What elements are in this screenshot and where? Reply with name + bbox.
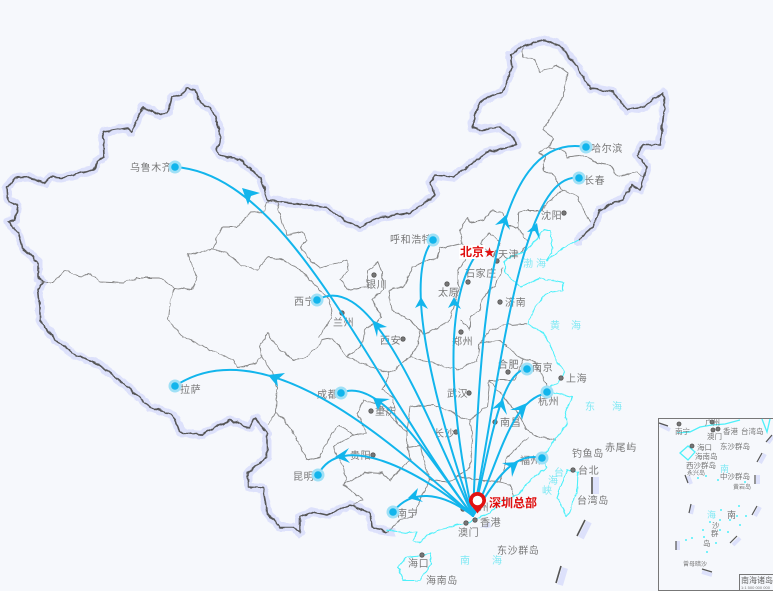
coastline and islands	[387, 230, 578, 580]
Hainan island outline	[398, 553, 432, 580]
provincial boundaries	[40, 47, 643, 532]
city markers and labels: 广州	[468, 502, 489, 514]
city markers and labels: 东沙群岛	[497, 544, 539, 557]
city markers and labels: 香港	[480, 517, 501, 529]
inset labels: 海	[707, 509, 716, 520]
city markers and labels: 哈尔滨	[591, 142, 623, 155]
city markers and labels: 拉萨	[180, 383, 201, 396]
sea labels: 渤	[523, 257, 533, 270]
Beijing label: 北京	[460, 244, 484, 259]
sea labels: 黄	[550, 319, 560, 332]
city markers and labels: 台北	[578, 464, 599, 477]
city markers and labels: 贵阳	[350, 449, 371, 462]
inset labels: 海南岛	[695, 451, 718, 461]
sea labels: 海	[612, 400, 622, 413]
city markers and labels: 昆明	[293, 471, 314, 483]
inset labels: 中沙群岛	[720, 471, 750, 481]
sea labels: 东	[585, 400, 595, 413]
inset city dots	[677, 420, 720, 448]
sea labels: 南	[460, 554, 470, 567]
inset scale box	[740, 574, 773, 590]
city markers and labels: 石家庄	[465, 267, 497, 280]
city markers and labels: 长春	[584, 175, 605, 187]
inset labels: 海口	[697, 442, 712, 452]
city markers and labels: 赤尾屿	[605, 442, 637, 454]
city markers and labels: 澳门	[458, 526, 479, 539]
inset labels: 香港	[723, 426, 738, 436]
destination dots	[168, 140, 592, 518]
inset labels: 东沙群岛	[720, 441, 750, 451]
city markers and labels	[130, 142, 637, 587]
inset labels: 沙	[712, 521, 720, 530]
city markers and labels: 银川	[366, 278, 387, 291]
route lines from Shenzhen	[175, 146, 586, 516]
city markers and labels: 济南	[505, 296, 526, 309]
inset cyan reefs	[685, 475, 747, 553]
sea labels: 台	[554, 466, 564, 479]
city markers and labels: 海南岛	[426, 574, 458, 587]
inset scale box: 1:1 500 000 000	[741, 585, 771, 590]
city markers and labels: 兰州	[333, 316, 354, 329]
city markers and labels: 西宁	[294, 295, 315, 308]
city markers and labels: 成都	[317, 389, 338, 401]
city markers and labels: 沈阳	[541, 209, 562, 222]
inset scale box: 南海诸岛	[741, 575, 773, 585]
Shenzhen headquarters pin	[469, 492, 486, 514]
city markers and labels: 西安	[380, 334, 401, 347]
city markers and labels: 太原	[438, 286, 459, 299]
inset coastline	[677, 419, 770, 460]
city markers and labels: 乌鲁木齐	[130, 161, 172, 174]
city markers and labels: 钓鱼岛	[572, 447, 604, 460]
city markers and labels: 南宁	[397, 507, 418, 520]
inset labels: 澳门	[707, 431, 722, 441]
city markers and labels: 福州	[520, 454, 541, 467]
city markers and labels: 海口	[408, 557, 429, 570]
inset labels	[675, 417, 764, 568]
city markers and labels: 杭州	[538, 395, 559, 408]
city markers and labels: 合肥	[498, 358, 519, 371]
city markers and labels: 上海	[566, 372, 587, 385]
city markers and labels: 武汉	[447, 387, 468, 400]
route arrowheads	[242, 188, 540, 502]
Beijing label	[459, 244, 495, 259]
city markers and labels: 台湾岛	[577, 494, 609, 507]
Beijing label: ★	[484, 247, 495, 259]
Taiwan island outline	[557, 470, 578, 518]
inset labels: 群	[711, 528, 719, 538]
city markers and labels: 南昌	[500, 416, 521, 429]
inset labels: 南	[727, 509, 736, 520]
national border with lilac glow	[7, 40, 665, 588]
inset labels: 黄岩岛	[733, 483, 751, 491]
inset nine-dash marks	[659, 423, 773, 575]
city markers and labels: 南京	[532, 361, 553, 374]
inset labels: 台湾岛	[741, 426, 764, 436]
sea labels: 峡	[542, 484, 552, 497]
city markers and labels: 呼和浩特	[390, 234, 432, 246]
city markers and labels: 天津	[498, 249, 519, 261]
inset labels: 南	[720, 463, 729, 474]
inset labels: 永兴岛	[687, 469, 705, 477]
inset labels: 岛	[703, 538, 710, 548]
sea labels	[460, 257, 622, 567]
city markers and labels: 重庆	[375, 405, 396, 418]
south sea nine-dash marks	[556, 477, 596, 585]
inset labels: 西沙群岛	[686, 460, 716, 470]
sea labels: 海	[571, 319, 581, 332]
city markers and labels: 郑州	[452, 335, 473, 348]
Shenzhen headquarters label: 深圳总部	[489, 495, 537, 510]
inset labels: 曾母暗沙	[683, 560, 707, 568]
inset labels: 南宁	[675, 426, 690, 436]
sea labels: 海	[548, 474, 558, 487]
inset: South China Sea islands	[658, 417, 773, 590]
sea labels: 海	[536, 257, 546, 270]
inset labels: 广州	[705, 417, 720, 427]
city markers and labels: 长沙	[434, 428, 455, 440]
sea labels: 海	[492, 554, 502, 567]
